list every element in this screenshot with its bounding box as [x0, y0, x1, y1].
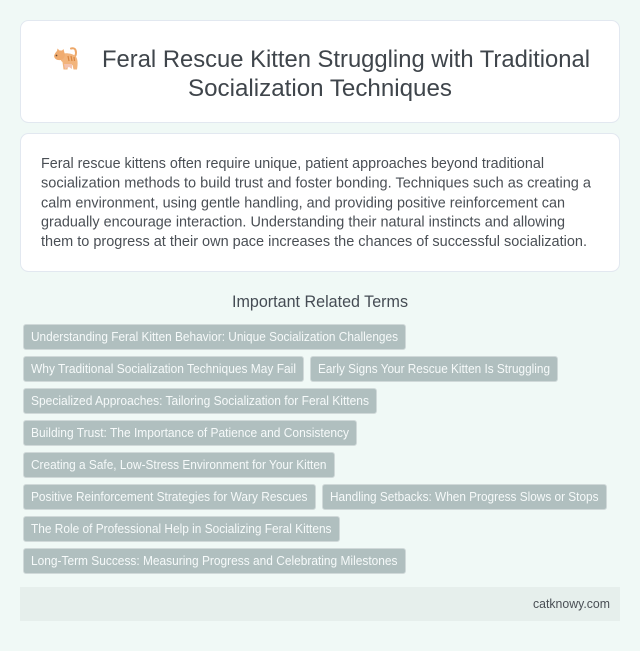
tag: early signs: Early Signs Your Rescue Kitten Is Struggling	[318, 361, 550, 376]
title: Socialization Techniques	[188, 75, 452, 102]
text block: description: socialization methods to build trust and foster bonding. Techniques such as creating a	[41, 174, 592, 192]
tag: positive reinforcement: Positive Reinforcement Strategies for Wary Rescues	[31, 489, 308, 504]
title: Feral Rescue Kitten Struggling with Traditional	[102, 46, 590, 73]
footer: site name: catknowy.com	[533, 596, 610, 611]
tag: safe environment	[24, 452, 334, 478]
footer bar	[20, 587, 620, 621]
tag: handling setbacks: Handling Setbacks: When Progress Slows or Stops	[330, 489, 599, 504]
text block: description	[41, 155, 592, 250]
tag: handling setbacks	[322, 484, 606, 510]
tag: building trust	[24, 420, 356, 446]
tag: early signs	[310, 356, 558, 382]
tag: professional help: The Role of Professional Help in Socializing Feral Kittens	[31, 521, 332, 536]
text block: description: them to progress at their own pace increases the chances of successful socialization.	[41, 233, 587, 250]
text block: description: calm environment, using gentle handling, and providing positive reinforcement can	[41, 194, 565, 212]
tag: specialized approaches: Specialized Approaches: Tailoring Socialization for Feral Kittens	[31, 393, 369, 408]
tag: why traditional techniques may fail: Why Traditional Socialization Techniques May Fail	[31, 361, 296, 376]
tag: understanding feral kitten behavior	[24, 324, 406, 350]
tag: long-term success: Long-Term Success: Measuring Progress and Celebrating Milestones	[31, 553, 398, 568]
heading: important related terms: Important Related Terms	[232, 293, 408, 311]
panel: description card	[20, 134, 620, 272]
icon: orange cat	[54, 48, 78, 70]
tag: building trust: Building Trust: The Importance of Patience and Consistency	[31, 425, 349, 440]
tag: long-term success	[24, 548, 406, 574]
tag: positive reinforcement	[24, 484, 316, 510]
panel: related terms tags	[24, 324, 606, 574]
tag: safe environment: Creating a Safe, Low-Stress Environment for Your Kitten	[31, 457, 326, 472]
text block: description: gradually encourage interaction. Understanding their natural instincts and allowing	[41, 214, 565, 230]
tag: why traditional techniques may fail	[24, 356, 304, 382]
tag: specialized approaches	[24, 388, 376, 414]
title	[102, 46, 590, 102]
text block: description: Feral rescue kittens often require unique, patient approaches beyond traditional	[41, 155, 544, 172]
panel: header card	[20, 20, 620, 122]
tag: understanding feral kitten behavior: Understanding Feral Kitten Behavior: Unique Socialization Challenges	[31, 329, 398, 344]
tag: professional help	[24, 516, 340, 542]
